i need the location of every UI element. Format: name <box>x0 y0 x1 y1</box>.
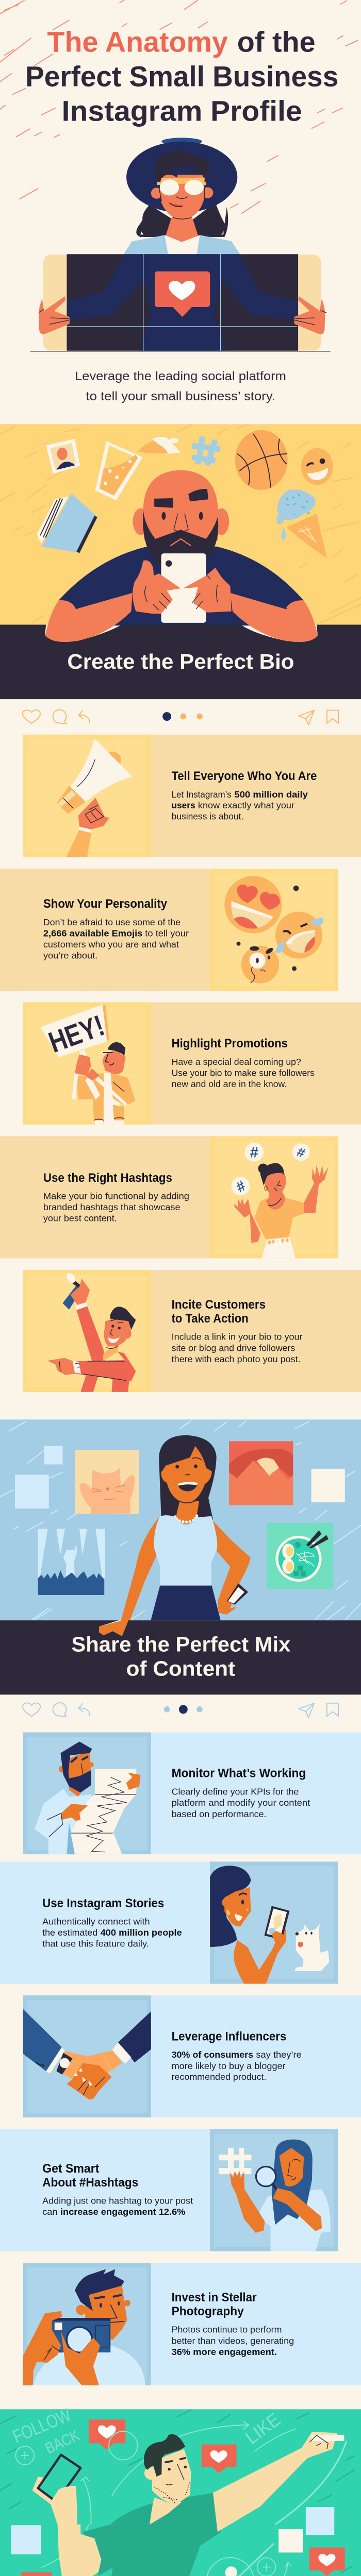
illustration: woman with magnifier <box>210 2129 338 2251</box>
body text: 36% more engagement. <box>172 2347 277 2357</box>
heading: Use the Right Hashtags <box>43 1171 172 1185</box>
chalk doodles: LIKE <box>241 2409 284 2448</box>
card: invest in stellar photography <box>23 2263 361 2385</box>
icon: basketball <box>235 430 288 490</box>
body text: site or blog and drive followers <box>172 1343 295 1353</box>
body text <box>172 1331 303 1364</box>
card: highlight promotions <box>23 1003 361 1125</box>
body text <box>172 1057 315 1089</box>
body text: your best content. <box>43 1213 117 1224</box>
body text: 2,666 available Emojis <box>43 928 142 938</box>
panel: green engagement hero <box>0 2409 361 2576</box>
body text: 400 million people <box>101 1927 182 1938</box>
card: leverage influencers <box>23 1995 361 2117</box>
hero: title and illustration <box>0 0 358 351</box>
body text: Include a link in your bio to your <box>172 1331 303 1342</box>
illustration: man with paper chart <box>23 1732 151 1854</box>
heading: Tell Everyone Who You Are <box>172 769 317 783</box>
section heading <box>71 1632 291 1681</box>
illustration: man pointing with spray can <box>23 1270 151 1392</box>
user and plus doodles <box>206 2557 322 2576</box>
body text <box>172 2325 294 2357</box>
section heading: Share the Perfect Mix <box>71 1632 291 1656</box>
panel: blue content hero <box>0 1419 361 1620</box>
heading: Monitor What’s Working <box>172 1767 306 1781</box>
body text: Clearly define your KPIs for the <box>172 1786 299 1797</box>
section: perfect your engagement strategy <box>0 2404 361 2576</box>
panel: yellow bio hero <box>0 424 361 625</box>
subtitle <box>75 369 286 403</box>
body text: better than videos, generating <box>172 2336 294 2346</box>
body text <box>172 789 308 822</box>
body text <box>42 1916 182 1949</box>
body text: the estimated <box>42 1927 97 1938</box>
body text: 500 million daily <box>234 789 308 800</box>
body text: to tell your <box>145 928 189 938</box>
illustration: woman juggling hashtags <box>210 1136 338 1258</box>
chalk doodles: FOLLOW <box>10 2404 74 2447</box>
card: show your personality <box>0 869 338 991</box>
sticky squares <box>11 2507 334 2554</box>
illustration: emojis <box>210 869 338 991</box>
illustration: woman juggling hashtags: # <box>295 1145 307 1161</box>
icon: photo <box>46 439 80 474</box>
body text: that use this feature daily. <box>42 1939 149 1949</box>
body text: 30% of consumers <box>172 2049 253 2060</box>
photo: mountain <box>229 1441 293 1505</box>
card: use the right hashtags <box>0 1136 338 1258</box>
body text: increase engagement 12.6% <box>60 2207 185 2217</box>
like bubbles <box>21 2419 345 2576</box>
heading: Use Instagram Stories <box>42 1896 164 1910</box>
card: tell everyone who you are <box>23 735 361 857</box>
body text: you’re about. <box>43 950 97 960</box>
body text: business is about. <box>172 811 243 822</box>
section heading: Create the Perfect Bio <box>67 650 294 673</box>
illustration: woman holding instagram post <box>30 138 331 351</box>
body text: Don’t be afraid to use some of the <box>43 917 180 927</box>
body text: know exactly what your <box>198 800 294 810</box>
body text <box>43 917 189 960</box>
illustration: woman filming dog <box>210 1861 338 1984</box>
photo tiles <box>15 1446 345 1509</box>
illustration: man with camera <box>23 2263 151 2385</box>
photo: concert <box>38 1529 105 1595</box>
card: get smart about hashtags <box>0 2129 338 2251</box>
chalk doodles <box>10 2404 347 2576</box>
icon: hashtag <box>192 436 220 465</box>
illustration: woman juggling hashtags: # <box>233 1177 249 1196</box>
heading <box>42 2162 138 2190</box>
body text: users <box>172 800 195 810</box>
illustration: woman with phone <box>99 1435 251 1636</box>
body text <box>43 1191 189 1224</box>
body text: Let Instagram’s <box>172 789 232 800</box>
subtitle: to tell your small business’ story. <box>86 389 275 403</box>
section heading: of Content <box>126 1657 236 1681</box>
subtitle: Leverage the leading social platform <box>75 369 286 383</box>
icon: book <box>37 494 97 553</box>
title: The Anatomy <box>47 26 228 58</box>
title: Perfect Small Business <box>25 60 338 92</box>
body text: branded hashtags that showcase <box>43 1202 180 1212</box>
icon row: yellow section <box>23 710 338 725</box>
body text: say they’re <box>256 2049 302 2060</box>
body text: platform and modify your content <box>172 1798 310 1808</box>
body text <box>172 2049 302 2082</box>
body text <box>172 1786 310 1819</box>
body text: there with each photo you post. <box>172 1354 301 1364</box>
body text: Photos continue to perform <box>172 2325 282 2335</box>
body text: can <box>42 2207 58 2217</box>
body text: more likely to buy a blogger <box>172 2061 286 2071</box>
heading: Photography <box>172 2304 244 2318</box>
card: monitor what's working <box>23 1732 361 1854</box>
illustration: handshake <box>23 1995 151 2117</box>
icon: ice cream <box>276 489 327 558</box>
section: share the perfect mix <box>0 1419 361 1694</box>
icon: drink glass <box>95 437 180 500</box>
heading: Invest in Stellar <box>172 2291 257 2304</box>
illustration: man with hey sign <box>23 1003 151 1125</box>
body text: Have a special deal coming up? <box>172 1057 301 1067</box>
heading: Incite Customers <box>172 1298 266 1312</box>
body text <box>42 2196 193 2217</box>
heading <box>172 2291 257 2318</box>
heading: Leverage Influencers <box>172 2030 286 2044</box>
photo: ramen bowl <box>267 1523 333 1588</box>
body text: Make your bio functional by adding <box>43 1191 189 1201</box>
illustration: megaphone <box>23 735 151 857</box>
chalk doodles: BACK <box>43 2427 82 2458</box>
card: incite customers <box>23 1270 361 1392</box>
body text: Use your bio to make sure followers <box>172 1067 315 1078</box>
body text: Adding just one hashtag to your post <box>42 2196 193 2206</box>
illustration: man drawing with chalk <box>32 2432 344 2576</box>
body text: customers who you are and what <box>43 939 179 950</box>
heading: About #Hashtags <box>42 2176 138 2190</box>
title: Instagram Profile <box>62 95 302 127</box>
body text: new and old are in the know. <box>172 1079 287 1089</box>
heading: Get Smart <box>42 2162 99 2176</box>
heading: Highlight Promotions <box>172 1037 288 1050</box>
illustration: bald man on phone <box>45 470 318 642</box>
icon row: blue section <box>23 1703 338 1718</box>
heading: to Take Action <box>172 1312 249 1326</box>
illustration: woman juggling hashtags: # <box>250 1144 258 1161</box>
heading <box>172 1298 266 1326</box>
illustration: man with hey sign: HEY! <box>44 1009 109 1059</box>
title <box>25 26 338 127</box>
heading: Show Your Personality <box>43 897 168 911</box>
title: of the <box>237 26 316 58</box>
body text: Authentically connect with <box>42 1916 150 1926</box>
body text: based on performance. <box>172 1809 267 1819</box>
band: create the perfect bio <box>0 624 361 699</box>
section: create the perfect bio <box>0 369 361 642</box>
photo: cat <box>75 1450 139 1514</box>
band: share the perfect mix <box>0 1620 361 1694</box>
body text: recommended product. <box>172 2072 267 2082</box>
card: use instagram stories <box>0 1861 338 1984</box>
icon: winking emoji <box>301 448 333 485</box>
